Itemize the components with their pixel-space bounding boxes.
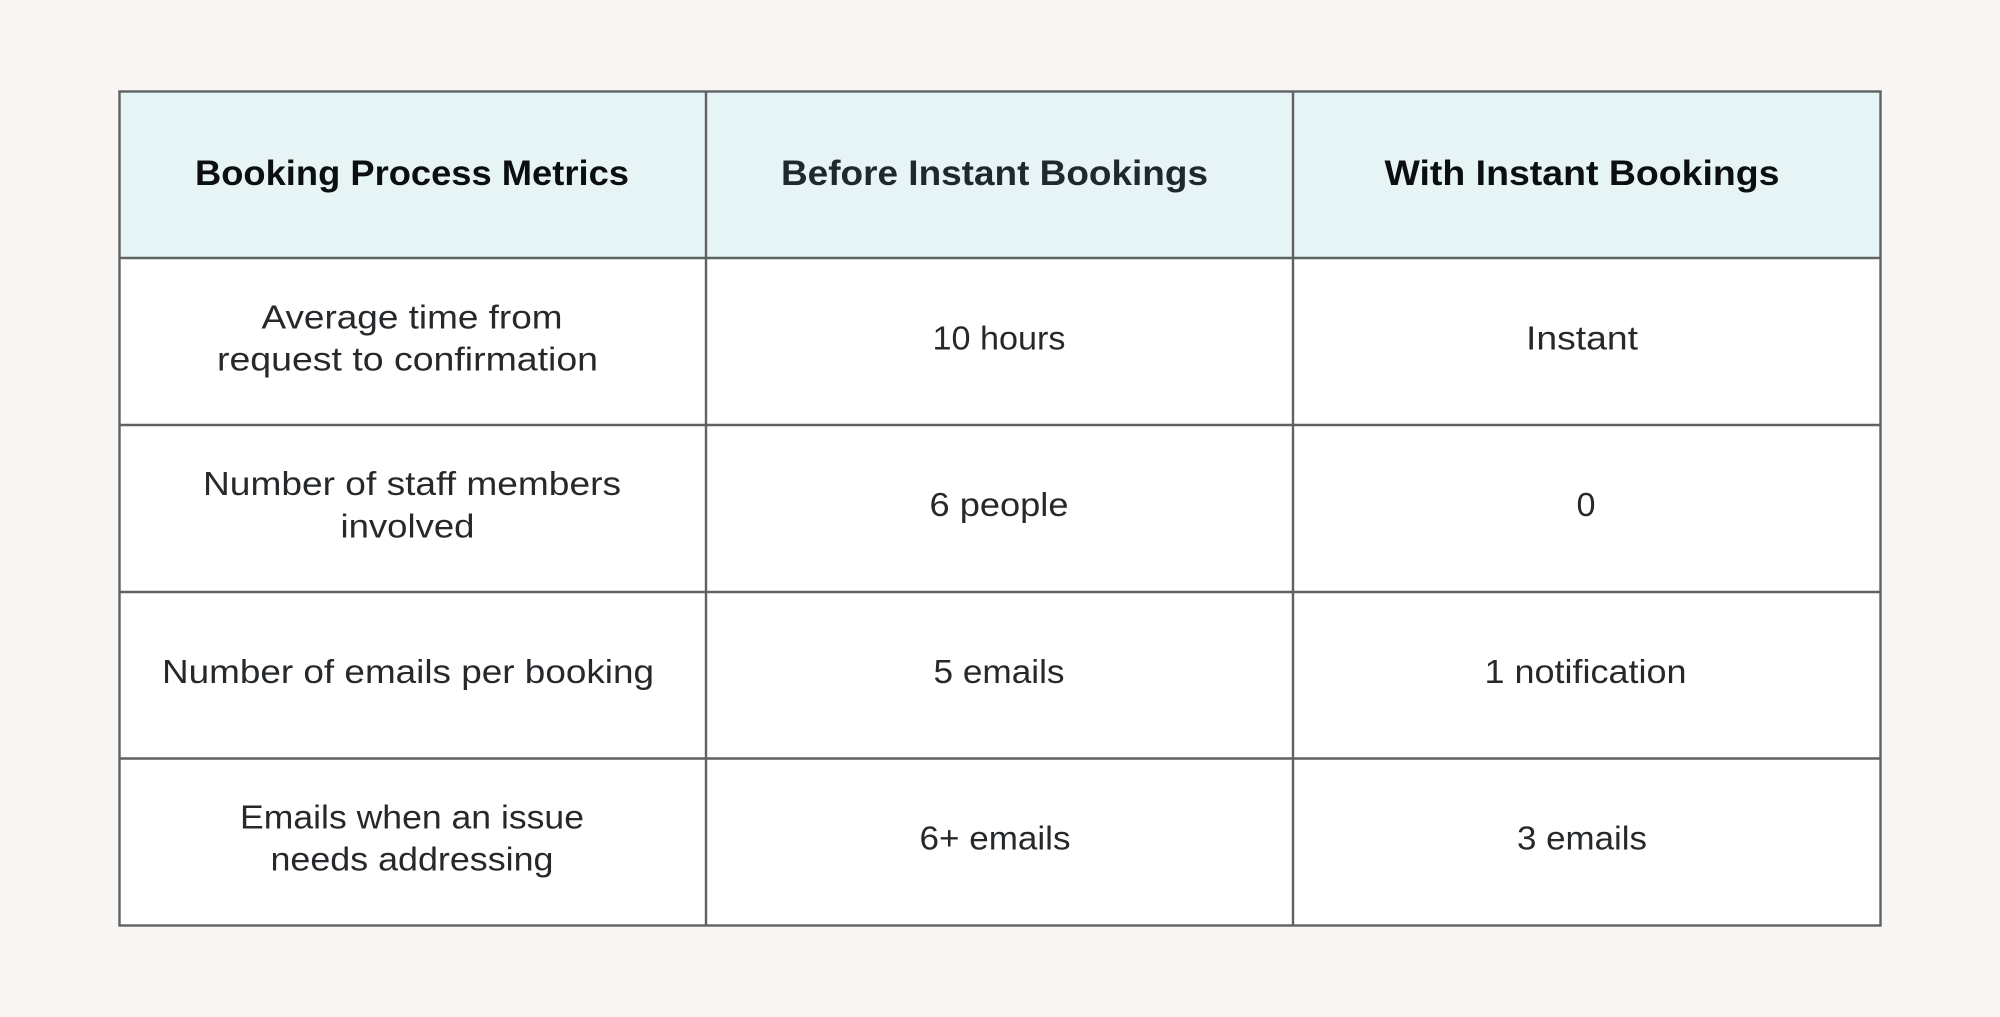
metric label: average time: request to confirmation	[217, 340, 598, 378]
heading: Booking Process Metrics: Booking Process Metrics	[195, 154, 629, 193]
before value: 6+ emails: 6+ emails	[920, 820, 1070, 856]
metric label: staff members: Number of staff members	[203, 465, 621, 502]
table body panel	[120, 92, 1880, 926]
with value: 0: 0	[1576, 486, 1596, 523]
row: issue emails	[240, 798, 1647, 878]
table header band	[120, 92, 1880, 258]
metric label: staff members	[203, 465, 621, 544]
metric label: issue emails: Emails when an issue	[240, 798, 584, 836]
metric label: issue emails: needs addressing	[270, 840, 554, 878]
heading: With Instant Bookings: With Instant Bookings	[1384, 154, 1780, 193]
header row	[195, 154, 1780, 193]
before value: 6 people: 6 people	[930, 486, 1068, 523]
with value: Instant: Instant	[1526, 320, 1638, 356]
with value: 3 emails: 3 emails	[1517, 820, 1647, 856]
row: staff members	[203, 465, 1596, 544]
row: average time	[217, 298, 1638, 378]
heading: Before Instant Bookings: Before Instant Bookings	[781, 154, 1208, 193]
before value: 5 emails: 5 emails	[934, 653, 1064, 690]
row: emails per booking	[162, 653, 1686, 690]
metric label: emails per booking: Number of emails per booking	[162, 653, 654, 690]
metric label: average time: Average time from	[262, 298, 562, 336]
metric label: staff members: involved	[340, 508, 474, 544]
before value: 10 hours: 10 hours	[932, 320, 1066, 356]
metric label: average time	[217, 298, 598, 378]
with value: 1 notification: 1 notification	[1484, 653, 1686, 690]
metric label: issue emails	[240, 798, 584, 878]
